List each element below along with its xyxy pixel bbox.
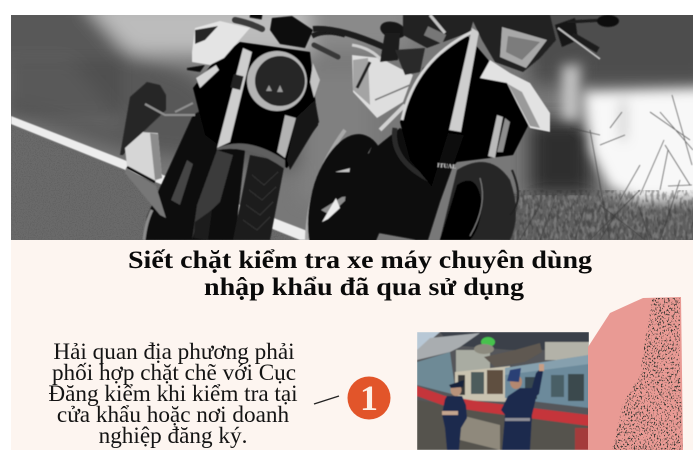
- road edge line: [11, 116, 310, 240]
- rear bike body: [352, 55, 413, 118]
- connector line: [314, 396, 339, 404]
- front tyre: [233, 155, 285, 240]
- officer left: [442, 380, 467, 450]
- rear handlebar: [313, 29, 386, 48]
- grass stems: [520, 95, 693, 240]
- bike 1 (left): [120, 15, 345, 240]
- text block: step 1: Hải quan địa phương phải: [53, 339, 295, 365]
- handlebar cluster: [270, 16, 313, 48]
- decorative pink panel: [588, 297, 683, 450]
- background panel: [11, 240, 693, 450]
- officer right: [501, 364, 544, 450]
- text block: step 1: phối hợp chặt chẽ với Cục: [52, 360, 296, 386]
- machinery: [417, 352, 456, 395]
- fairing: [480, 60, 550, 132]
- truck red bed: [417, 386, 589, 426]
- fender: [217, 144, 285, 169]
- title: Siết chặt kiểm tra xe máy chuyên dùng: [128, 245, 592, 274]
- road: [11, 124, 305, 240]
- icon: number 1 badge: 1: [360, 378, 378, 418]
- side panel right: [287, 100, 319, 170]
- side bag: [120, 82, 166, 155]
- title: nhập khẩu đã qua sử dụng: [204, 272, 524, 301]
- rear wheel: [307, 130, 345, 240]
- text block: step 1: cửa khẩu hoặc nơi doanh: [57, 402, 289, 428]
- main body: [400, 35, 530, 188]
- road grain: [11, 126, 300, 240]
- truck lower chassis: [417, 400, 589, 450]
- hero photo: motorcycles: [11, 15, 693, 240]
- right handlebar: [555, 18, 578, 47]
- fork right: [277, 115, 296, 158]
- text block: step 1: Đăng kiểm khi kiểm tra tại: [48, 381, 298, 407]
- fork: [449, 28, 479, 132]
- icon: number 1 badge: [348, 376, 390, 420]
- text block: step 1: [48, 339, 298, 449]
- scrap pile: [484, 343, 542, 367]
- brake caliper: [194, 210, 212, 240]
- text block: step 1: nghiệp đăng ký.: [99, 423, 247, 449]
- tank: [192, 21, 250, 65]
- title: [128, 245, 592, 301]
- headlight: [247, 51, 307, 111]
- bike 2 (right): [304, 15, 620, 240]
- helmet: [403, 15, 475, 48]
- fork left: [217, 48, 252, 148]
- bike 2 (right): ITUAL: [437, 163, 456, 171]
- front tyre: [440, 162, 516, 240]
- headlight hood: [470, 15, 556, 72]
- photo: customs officers inspecting machinery on a truck: [417, 332, 589, 450]
- grass texture: [11, 60, 693, 240]
